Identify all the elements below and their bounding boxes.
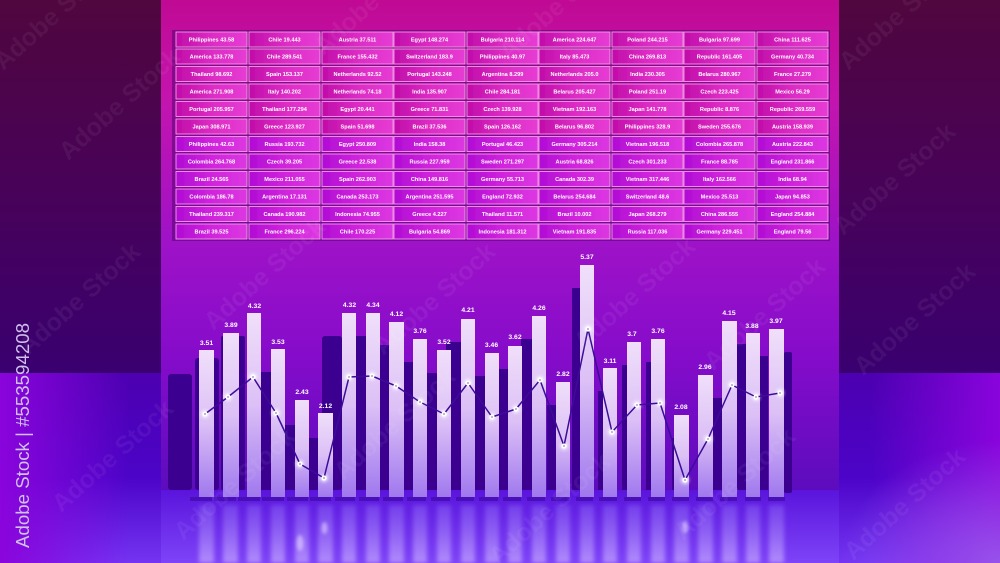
row 8: Sweden 271.297: [481, 160, 524, 166]
row 8: Greece 22.538: [339, 160, 376, 166]
row 11: Canada 190.982: [264, 212, 305, 218]
row 11: Brazil 10.002: [558, 212, 591, 218]
row 12: Germany 229.451: [696, 230, 743, 236]
row 7: Portugal 46.423: [482, 142, 523, 148]
bar value labels: 4.21: [461, 307, 475, 314]
row 6: Philippines 328.9: [625, 124, 670, 130]
watermark pattern: Adobe Stock: [329, 362, 461, 486]
row 9: Italy 162.566: [703, 177, 736, 183]
row 1: Poland 244.215: [627, 38, 668, 44]
row 12: Bulgaria 54.869: [409, 230, 450, 236]
row 1: Egypt 148.274: [411, 38, 449, 44]
bar value labels: 4.12: [390, 311, 403, 318]
row 11: Indonesia 74.955: [335, 212, 380, 218]
row 10: Belarus 254.684: [553, 194, 597, 200]
row 1: Chile 19.443: [268, 38, 301, 44]
row 10: Canada 253.173: [337, 194, 378, 200]
row 8: Colombia 264.768: [188, 160, 235, 166]
row 1: Philippines 43.58: [189, 38, 234, 44]
row 6: Belarus 96.802: [555, 124, 594, 130]
row 5: Thailand 177.294: [262, 107, 308, 113]
row 10: Switzerland 48.6: [626, 194, 669, 200]
row 7: Austria 222.843: [772, 142, 813, 148]
watermark pattern: Adobe Stock: [199, 212, 331, 336]
row 12: Brazil 39.525: [195, 230, 228, 236]
bar value labels: 5.37: [580, 254, 594, 261]
row 4: [176, 84, 828, 99]
bars: [199, 265, 784, 497]
row 3: Argentina 8.299: [482, 72, 523, 78]
row 8: Czech 301.233: [628, 160, 667, 166]
row 5: [176, 102, 828, 116]
watermark pattern: Adobe Stock: [849, 257, 981, 381]
row 3: India 230.305: [630, 72, 665, 78]
row 12: Chile 170.225: [340, 230, 375, 236]
row 5: Republic 269.559: [770, 107, 815, 113]
watermark pattern: Adobe Stock: [47, 394, 179, 518]
stock id caption: Adobe Stock | #553594208: [13, 323, 33, 548]
bar value labels: 2.96: [698, 364, 712, 371]
row 6: Spain 126.162: [484, 124, 521, 130]
bar value labels: 3.53: [271, 339, 285, 346]
row 2: China 269.813: [629, 54, 666, 60]
row 4: Netherlands 74.18: [334, 90, 381, 96]
floor reflections of bars: [199, 505, 784, 563]
watermark pattern: Adobe Stock: [699, 252, 831, 376]
row 1: Bulgaria 97.699: [699, 38, 740, 44]
row 4: Mexico 56.29: [775, 90, 810, 96]
bar value labels: 3.97: [769, 318, 783, 325]
row 9: Germany 55.713: [481, 177, 524, 183]
row 10: [176, 189, 828, 204]
bar value labels: [200, 254, 783, 411]
row 4: Chile 284.181: [485, 90, 520, 96]
row 5: Republic 8.876: [700, 107, 739, 113]
row 8: Czech 39.205: [267, 160, 302, 166]
row 2: France 155.432: [337, 54, 378, 60]
row 2: Switzerland 183.9: [406, 54, 453, 60]
bar value labels: 4.15: [722, 310, 736, 317]
row 4: Poland 251.19: [629, 90, 666, 96]
row 11: Greece 4.227: [412, 212, 447, 218]
bar chart: [199, 254, 784, 497]
row 2: Republic 161.405: [697, 54, 742, 60]
row 6: Greece 123.927: [264, 124, 305, 130]
row 1: China 111.625: [774, 38, 811, 44]
row 7: Germany 305.214: [551, 142, 598, 148]
row 5: Czech 139.928: [483, 107, 522, 113]
row 12: Vietnam 191.835: [553, 230, 596, 236]
row 1: Bulgaria 210.114: [481, 38, 525, 44]
row 11: [176, 206, 828, 222]
bar value labels: 4.34: [366, 302, 380, 309]
row 11: England 254.884: [771, 212, 815, 218]
watermark pattern: Adobe Stock: [169, 422, 301, 546]
bar value labels: 4.26: [532, 305, 546, 312]
row 3: Belarus 280.967: [698, 72, 741, 78]
row 2: Germany 40.734: [771, 54, 815, 60]
row 6: Brazil 37.536: [413, 124, 446, 130]
row 6: Sweden 255.676: [698, 124, 741, 130]
bar value labels: 2.12: [319, 403, 332, 410]
bar value labels: 4.32: [343, 302, 356, 309]
bar value labels: 3.89: [224, 322, 238, 329]
row 9: Mexico 211.055: [264, 177, 305, 183]
row 2: Chile 289.541: [267, 54, 302, 60]
row 4: Italy 140.202: [268, 90, 301, 96]
row 3: [176, 66, 828, 82]
row 8: France 88.785: [701, 160, 738, 166]
row 4: Czech 223.425: [700, 90, 739, 96]
row 3: Thailand 98.692: [191, 72, 232, 78]
row 9: Spain 262.903: [339, 177, 376, 183]
row 8: Austria 68.826: [556, 160, 593, 166]
row 7: Vietnam 196.518: [626, 142, 669, 148]
row 11: China 286.555: [701, 212, 738, 218]
watermark pattern: Adobe Stock: [669, 422, 801, 546]
row 11: Japan 268.279: [629, 212, 666, 218]
bar value labels: 2.82: [556, 371, 570, 378]
row 7: Colombia 265.878: [696, 142, 743, 148]
row 1: [176, 32, 828, 47]
row 12: [176, 224, 828, 239]
row 7: Russia 193.732: [264, 142, 305, 148]
row 12: Russia 117.036: [628, 230, 667, 236]
bar value labels: 3.88: [745, 323, 759, 330]
row 6: Spain 51.698: [341, 124, 374, 130]
watermark pattern: Adobe Stock: [369, 237, 501, 361]
row 5: Japan 141.778: [629, 107, 666, 113]
row 7: Egypt 250.809: [339, 142, 376, 148]
bar value labels: 2.43: [295, 389, 309, 396]
bar value labels: 3.62: [508, 334, 522, 341]
row 1: America 224.647: [553, 38, 596, 44]
reflected trend points: [296, 521, 688, 551]
row 10: Argentina 251.595: [406, 194, 453, 200]
row 7: Philippines 42.63: [189, 142, 234, 148]
bar bases: [190, 497, 785, 501]
row 2: Philippines 40.97: [480, 54, 525, 60]
bar value labels: 3.76: [651, 328, 665, 335]
row 8: England 231.866: [771, 160, 814, 166]
bar value labels: 3.76: [413, 328, 427, 335]
bar value labels: 3.51: [200, 340, 213, 347]
row 2: Italy 85.473: [560, 54, 589, 60]
row 6: [176, 119, 828, 134]
bar shadows on wall: [168, 288, 792, 493]
row 8: Russia 227.959: [409, 160, 450, 166]
bar value labels: 4.32: [248, 303, 261, 310]
watermark pattern: Adobe Stock: [54, 42, 186, 166]
trend line glow points: [201, 325, 784, 484]
row 2: [176, 49, 828, 64]
row 11: Thailand 11.571: [482, 212, 523, 218]
row 9: Brazil 24.565: [195, 177, 228, 183]
trend line point centers: [203, 327, 782, 482]
row 7: India 158.38: [414, 142, 445, 148]
row 1: Austria 37.511: [339, 38, 376, 44]
bar value labels: 3.11: [604, 358, 617, 365]
row 10: Argentina 17.131: [262, 194, 307, 200]
row 4: Belarus 205.427: [553, 90, 596, 96]
row 4: America 271.908: [190, 90, 233, 96]
row 12: England 79.56: [774, 230, 811, 236]
row 9: [176, 172, 828, 186]
bar value labels: 3.52: [437, 339, 451, 346]
watermark pattern: Adobe Stock: [14, 237, 146, 361]
row 5: Portugal 205.957: [189, 107, 234, 113]
row 5: Vietnam 192.163: [553, 107, 596, 113]
row 3: Spain 153.137: [266, 72, 303, 78]
row 9: China 149.816: [411, 177, 448, 183]
watermark pattern: Adobe Stock: [839, 442, 971, 563]
row 9: India 68.94: [778, 177, 808, 183]
row 9: Vietnam 317.446: [626, 177, 669, 183]
row 8: [176, 154, 828, 169]
data table: [172, 30, 830, 241]
row 7: [176, 136, 828, 152]
row 2: America 133.778: [190, 54, 233, 60]
row 5: Greece 71.831: [411, 107, 448, 113]
row 3: France 27.279: [774, 72, 811, 78]
row 10: England 72.932: [482, 194, 523, 200]
row 6: Austria 158.939: [772, 124, 813, 130]
row 5: Egypt 20.441: [340, 107, 375, 113]
row 9: Canada 302.39: [555, 177, 594, 183]
row 11: Thailand 239.317: [189, 212, 234, 218]
row 12: Indonesia 181.312: [479, 230, 526, 236]
row 10: Colombia 186.78: [189, 194, 234, 200]
bar value labels: 2.08: [674, 404, 688, 411]
row 3: Portugal 143.248: [407, 72, 452, 78]
row 3: Netherlands 92.52: [334, 72, 381, 78]
bar value labels: 3.46: [485, 342, 498, 349]
row 3: Netherlands 205.0: [551, 72, 598, 78]
row 10: Mexico 25.513: [701, 194, 738, 200]
trend line: [201, 325, 784, 484]
row 10: Japan 94.853: [775, 194, 810, 200]
watermark pattern: Adobe Stock: [829, 117, 961, 241]
row 6: Japan 308.971: [193, 124, 230, 130]
bar value labels: 3.7: [627, 331, 637, 338]
watermark pattern: Adobe Stock: [569, 232, 701, 356]
row 12: France 296.224: [264, 230, 305, 236]
row 4: India 135.907: [412, 90, 447, 96]
